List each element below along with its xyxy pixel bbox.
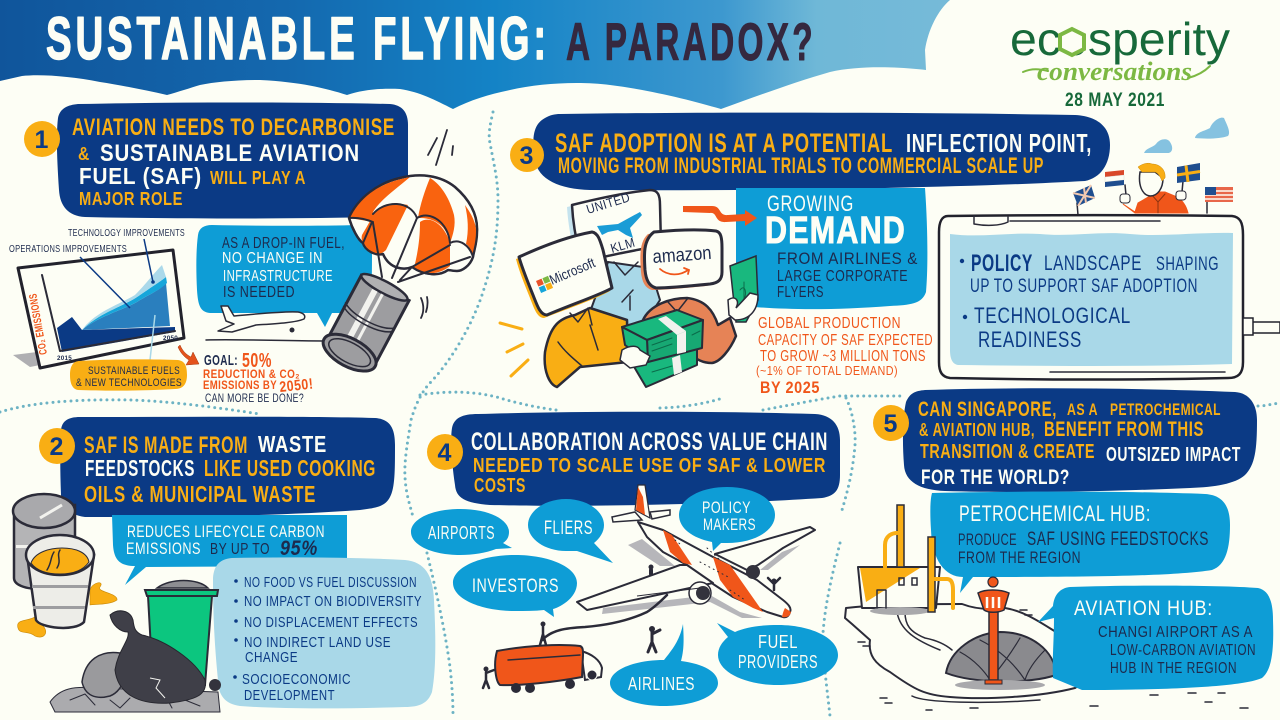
section 3 heading: SAF ADOPTION IS AT A POTENTIAL	[555, 128, 893, 158]
benefits panel: NO DISPLACEMENT EFFECTS	[244, 614, 418, 631]
header band	[0, 0, 950, 109]
section 5 heading: FOR THE WORLD?	[921, 466, 1070, 489]
tablet frame	[939, 215, 1280, 380]
goal text	[203, 350, 314, 405]
petrochemical hub bubble: SAF USING FEEDSTOCKS	[1027, 529, 1209, 550]
production capacity text: TO GROW ~3 MILLION TONS	[760, 348, 926, 365]
policy panel	[950, 233, 1233, 366]
section 1	[9, 102, 477, 405]
icon: parachute drop barrel	[317, 130, 477, 379]
logo: ecosperity conversations: conversations	[1037, 57, 1192, 86]
section 1 heading	[72, 114, 395, 209]
section 5 heading	[918, 398, 1241, 489]
section 5 heading: & AVIATION HUB,	[919, 420, 1035, 440]
section 2 heading: SAF IS MADE FROM	[84, 432, 248, 459]
goal text: GOAL:	[204, 352, 238, 369]
bubble: policy makers: MAKERS	[703, 515, 756, 534]
section 4 banner	[451, 412, 840, 506]
benefits panel	[213, 557, 435, 708]
bubble: fuel providers	[717, 623, 838, 685]
section 2 banner	[60, 417, 395, 517]
section 4 heading	[471, 428, 828, 497]
section 2 heading: FEEDSTOCKS	[85, 455, 195, 481]
goal text: CAN MORE BE DONE?	[205, 391, 304, 405]
aviation hub bubble: HUB IN THE REGION	[1110, 660, 1237, 677]
section 2 number: 2	[50, 433, 64, 461]
benefits panel: CHANGE	[245, 649, 298, 666]
policy panel: TECHNOLOGICAL	[974, 303, 1131, 328]
section 3 heading	[555, 128, 1092, 178]
bubble: investors	[453, 555, 577, 617]
drop-in fuel bubble: NO CHANGE IN	[222, 250, 323, 267]
chart: CO2 emissions wedge: 2050	[163, 336, 178, 342]
carbon reduction bubble: 95%	[280, 537, 318, 560]
benefits panel: NO FOOD VS FUEL DISCUSSION	[244, 574, 417, 591]
bubble: fuel providers: FUEL	[758, 632, 798, 652]
section 1 number	[24, 121, 60, 157]
chart annotation: sustainable fuels	[70, 359, 187, 391]
bubble: airlines: AIRLINES	[628, 674, 695, 694]
event date: 28 MAY 2021	[1065, 90, 1165, 111]
section 5 heading: AS A	[1067, 400, 1098, 419]
petrochemical hub bubble	[930, 492, 1230, 593]
carbon reduction bubble: BY UP TO	[210, 541, 270, 558]
section 4 heading: NEEDED TO SCALE USE OF SAF & LOWER	[473, 455, 826, 477]
section 4 number: 4	[438, 439, 452, 467]
section 4 heading: COSTS	[474, 475, 526, 497]
section 4 number	[427, 434, 463, 470]
bubble: policy makers: POLICY	[702, 498, 751, 517]
chart: CO2 emissions wedge: 2015	[57, 356, 72, 362]
icon: clouds	[1144, 118, 1229, 153]
section 5 number: 5	[884, 410, 898, 438]
section 5 banner	[903, 388, 1257, 492]
island map outline	[845, 604, 1248, 710]
section 1 heading: &	[78, 144, 90, 164]
section 1 number: 1	[35, 126, 49, 154]
title: A PARADOX?	[566, 13, 816, 72]
section 2 heading: OILS & MUNICIPAL WASTE	[84, 481, 316, 507]
policy panel: UP TO SUPPORT SAF ADOPTION	[970, 276, 1198, 297]
chart: CO2 emissions wedge	[13, 239, 184, 368]
section 5 heading: BENEFIT FROM THIS	[1044, 418, 1204, 441]
section 5 number	[873, 405, 909, 441]
section 5	[845, 388, 1273, 710]
petrochemical hub bubble: PETROCHEMICAL HUB:	[959, 501, 1151, 526]
production capacity text	[756, 315, 933, 397]
logo: ecosperity conversations	[1010, 13, 1230, 86]
section 3 number: 3	[520, 142, 534, 170]
aviation hub bubble: AVIATION HUB:	[1074, 597, 1213, 620]
section 5 heading: TRANSITION & CREATE	[920, 441, 1095, 463]
section 3	[500, 113, 1280, 397]
section 2	[13, 417, 435, 712]
benefits panel: NO INDIRECT LAND USE	[244, 634, 391, 651]
illustration: corporate buyers: amazon	[652, 243, 712, 268]
goal text: 2050!	[279, 376, 314, 396]
bubble: investors: INVESTORS	[472, 576, 559, 597]
chart annotation: technology improvements: TECHNOLOGY IMPROVEMENTS	[68, 228, 185, 239]
section 1 heading: FUEL (SAF)	[79, 163, 202, 189]
section 4 heading: COLLABORATION ACROSS VALUE CHAIN	[471, 428, 828, 456]
section 5 heading: CAN SINGAPORE,	[918, 398, 1057, 421]
drop-in fuel bubble: AS A DROP-IN FUEL,	[222, 235, 345, 252]
chart annotation: sustainable fuels: & NEW TECHNOLOGIES	[76, 377, 182, 389]
policy panel: LANDSCAPE	[1044, 252, 1142, 275]
aircraft	[577, 485, 815, 618]
bubble: fuel providers: PROVIDERS	[738, 652, 818, 672]
logo: ecosperity conversations: ecosperity	[1010, 13, 1230, 65]
bubble: fliers	[528, 499, 613, 563]
goal text: REDUCTION & CO₂	[203, 367, 300, 381]
section 1 banner	[57, 102, 408, 218]
icon: oil barrels	[13, 494, 117, 637]
icon: small aircraft on runway	[206, 306, 325, 341]
chart: CO2 emissions wedge: CO₂ EMISSIONS	[27, 292, 50, 356]
illustration: corporate buyers: Microsoft	[547, 254, 597, 288]
section 4	[411, 412, 840, 706]
section 1 heading: AVIATION NEEDS TO DECARBONISE	[72, 114, 395, 141]
production capacity text: (~1% OF TOTAL DEMAND)	[756, 363, 898, 378]
section 1 heading: WILL PLAY A	[210, 168, 306, 188]
petrochemical hub bubble: FROM THE REGION	[958, 548, 1081, 567]
bubble: airports: AIRPORTS	[428, 523, 495, 543]
drop-in fuel bubble: INFRASTRUCTURE	[223, 268, 333, 285]
petrochemical hub bubble: PRODUCE	[958, 530, 1017, 549]
growing demand panel: FLYERS	[777, 284, 824, 301]
section 3 heading: MOVING FROM INDUSTRIAL TRIALS TO COMMERCIAL SCALE UP	[558, 153, 1044, 178]
growing demand panel: FROM AIRLINES &	[777, 249, 918, 268]
bubble: policy makers	[679, 487, 775, 551]
carbon reduction bubble: REDUCES LIFECYCLE CARBON	[127, 522, 325, 541]
production capacity text: CAPACITY OF SAF EXPECTED	[758, 332, 933, 349]
illustration: corporate buyers: UNITED	[584, 189, 632, 217]
goal text: EMISSIONS BY	[203, 378, 277, 392]
production capacity text: BY 2025	[760, 378, 820, 397]
section 2 heading: LIKE USED COOKING	[204, 455, 376, 481]
icon: green bin and waste bags	[50, 580, 221, 712]
arrow to goal	[178, 345, 199, 365]
section 2 heading	[84, 431, 376, 507]
carbon reduction bubble	[112, 515, 347, 585]
section 3 number	[510, 138, 544, 172]
chart annotation: operations improvements: OPERATIONS IMPROVEMENTS	[9, 244, 127, 255]
policy panel: POLICY	[971, 250, 1033, 277]
illustration: corporate buyers	[500, 189, 758, 387]
bubble: airports	[411, 509, 512, 555]
carbon reduction bubble: EMISSIONS	[126, 539, 201, 558]
growing demand panel	[736, 188, 927, 309]
aviation hub bubble	[1038, 586, 1273, 690]
bubble: fliers: FLIERS	[544, 518, 593, 539]
policy panel: READINESS	[978, 327, 1082, 352]
icon: Changi dome and control tower	[946, 577, 1056, 690]
drop-in fuel bubble: IS NEEDED	[223, 284, 295, 301]
section 5 heading: PETROCHEMICAL	[1110, 400, 1221, 419]
section 1 heading: MAJOR ROLE	[79, 189, 183, 209]
growing demand panel: GROWING	[767, 191, 854, 216]
growing demand panel: LARGE CORPORATE	[777, 268, 908, 285]
goal text: 50%	[242, 350, 272, 372]
section 2 heading: WASTE	[258, 431, 327, 457]
section 3 banner	[533, 113, 1110, 190]
benefits panel: NO IMPACT ON BIODIVERSITY	[244, 593, 422, 610]
title: SUSTAINABLE FLYING:	[46, 5, 550, 72]
bubble: airlines	[610, 624, 718, 706]
section 3 heading: INFLECTION POINT,	[906, 128, 1092, 158]
benefits panel: DEVELOPMENT	[244, 687, 335, 704]
arrow to demand	[683, 206, 757, 226]
section 2 number	[39, 428, 75, 464]
illustration: corporate buyers: KLM	[609, 235, 637, 256]
drop-in fuel bubble	[196, 225, 372, 327]
fuel truck and ground crew	[483, 564, 780, 693]
chart annotation: sustainable fuels: SUSTAINABLE FUELS	[88, 365, 180, 377]
production capacity text: GLOBAL PRODUCTION	[758, 315, 901, 332]
illustration: man with flags	[1073, 163, 1233, 215]
growing demand panel: DEMAND	[765, 210, 906, 252]
section 1 heading: SUSTAINABLE AVIATION	[100, 140, 360, 167]
policy panel: SHAPING	[1156, 254, 1219, 275]
benefits panel: SOCIOECONOMIC	[242, 671, 351, 688]
icon: refinery	[858, 505, 953, 615]
